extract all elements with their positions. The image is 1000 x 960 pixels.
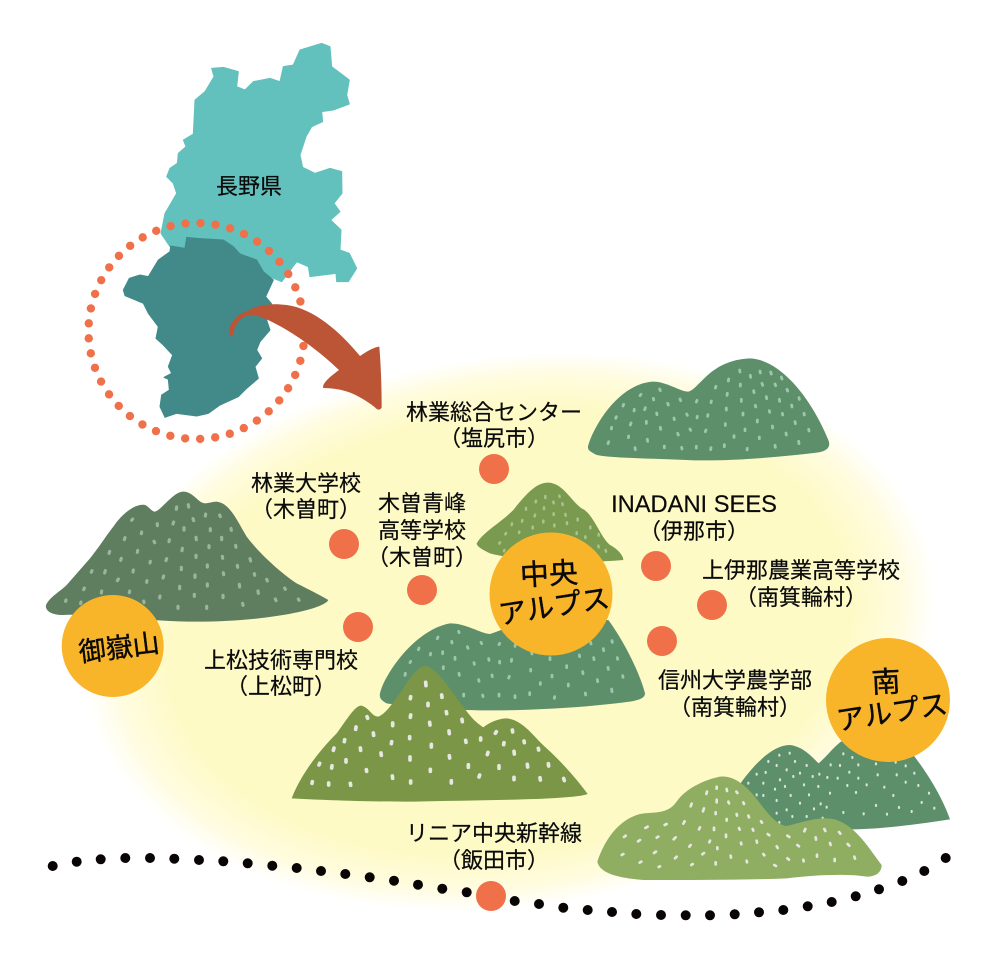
- label: Kiso Seiho High School: 木曽青峰: [378, 491, 466, 516]
- badge: Southern Alps: 南: [871, 665, 901, 700]
- yellow glow background: [48, 299, 972, 960]
- mountain: central Alps lower: [380, 620, 645, 710]
- badge: Southern Alps: アルプス: [834, 688, 950, 737]
- mountain: top right: [588, 358, 829, 460]
- label: Linear Chuo Shinkansen: リニア中央新幹線: [406, 821, 582, 846]
- label: Agematsu Technical School: （上松町）: [226, 674, 336, 699]
- map of Nagano prefecture: [123, 43, 357, 417]
- label: Forestry College: 林業大学校: [251, 471, 361, 496]
- label: Kiso Seiho High School: 高等学校: [378, 518, 466, 543]
- label: Linear Chuo Shinkansen: （飯田市）: [439, 848, 549, 873]
- region: southern Nagano (dark): [123, 237, 273, 417]
- label: Shinshu University Faculty of Agriculture: （南箕輪村）: [669, 695, 801, 720]
- mountain: olive front: [292, 666, 588, 802]
- dotted circle around southern Nagano: [88, 223, 304, 439]
- label: Shinshu University Faculty of Agriculture: 信州大学農学部: [658, 668, 812, 693]
- mountain: Ontake: [46, 492, 328, 622]
- label: Agematsu Technical School: 上松技術専門校: [204, 648, 358, 673]
- label: Nagano prefecture: 長野県: [216, 174, 282, 199]
- badge: Mt. Ontake: [62, 595, 164, 697]
- mountain: central Alps top: [477, 483, 623, 562]
- mountain: southern Alps front: [597, 777, 882, 880]
- location markers: [329, 454, 727, 911]
- label: Kiso Seiho High School: （木曽町）: [367, 545, 477, 570]
- label: Kami-Ina Agricultural High School: 上伊那農業高等学校: [702, 558, 900, 583]
- mountain: southern Alps back: [739, 740, 950, 829]
- region: Nagano prefecture (light): [161, 43, 357, 282]
- badge: Central Alps: 中央: [519, 557, 579, 592]
- badge: Mt. Ontake: 御嶽山: [77, 628, 161, 668]
- badge: Southern Alps: [826, 638, 950, 762]
- label: INADANI SEES: INADANI SEES: [611, 492, 777, 518]
- label: Forestry College: （木曽町）: [251, 497, 361, 522]
- label: Forestry General Center: （塩尻市）: [439, 426, 549, 451]
- label: INADANI SEES: （伊那市）: [639, 519, 749, 544]
- label: Forestry General Center: 林業総合センター: [406, 400, 582, 425]
- arrow: [229, 304, 382, 410]
- badge: Central Alps: アルプス: [496, 582, 612, 631]
- Linear Shinkansen dotted line: [53, 858, 946, 915]
- label: Kami-Ina Agricultural High School: （南箕輪村）: [735, 585, 867, 610]
- badge: Central Alps: [490, 532, 612, 656]
